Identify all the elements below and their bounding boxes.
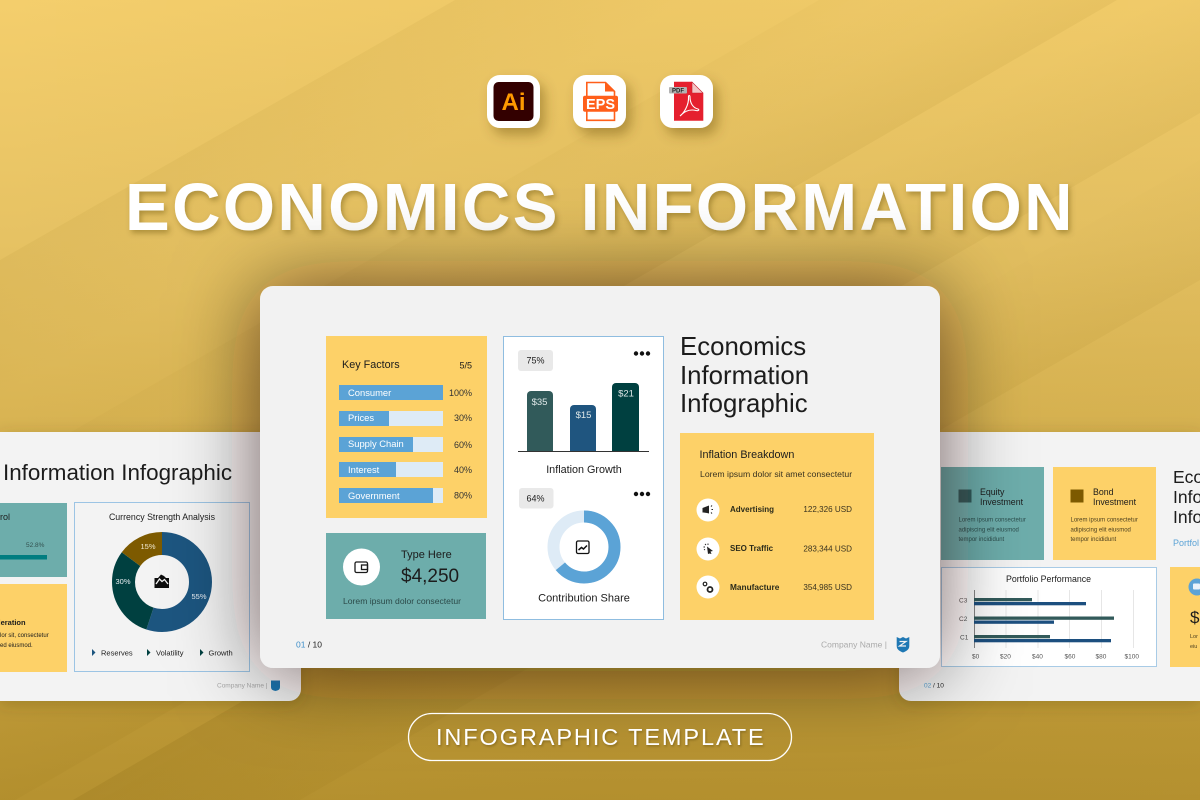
panel: type here value: Lorem ipsum dolor consectetur [343,596,461,606]
page number: 01 / 10 [296,640,322,650]
panel: key factors: 5/5 [459,360,472,370]
slide background [260,286,940,668]
panel: teal control: rol [0,512,10,522]
panel: yellow value: eiu [1190,644,1197,650]
row: advertising: Advertising [730,505,774,514]
slide title: Economics [680,333,806,361]
row: advertising: 122,326 USD [803,505,852,514]
bar chart: inflation growth [518,383,649,452]
legend: Reserves [101,648,133,658]
bar: prices: Prices [348,412,374,423]
donut chart: 55% [191,592,207,601]
panel: type here value [326,533,486,619]
right slide subtitle: Portfol [1173,538,1199,548]
bar chart: $100 [1124,654,1139,660]
chart heading: Inflation Growth [546,464,622,476]
slide title [680,333,809,418]
panel: yellow moderation: ed eiusmod. [0,643,33,649]
icon: gears [703,582,712,592]
panel: bond investment: tempor incididunt [1070,537,1117,543]
panel: bond investment: adipiscing elit eiusmod [1070,528,1131,534]
bar: interest: Interest [348,464,380,475]
left slide title: Information Infographic [3,460,232,485]
icon: trend chart [576,541,589,554]
panel: currency strength analysis [74,502,250,672]
slide title: Information [680,362,809,390]
panel: equity investment: Lorem ipsum consectetur [958,518,1026,524]
panel: equity investment: tempor incididunt [958,537,1005,543]
icon: Adobe Illustrator: Ai [502,89,526,116]
row: SEO traffic [696,538,852,560]
bar chart: inflation growth: $35 [532,397,547,408]
bar: interest [339,462,472,477]
chart heading: Currency Strength Analysis [109,512,216,522]
panel: bond investment: Investment [1093,497,1137,507]
row: SEO traffic: SEO Traffic [730,544,774,553]
bar: consumer: Consumer [348,387,391,398]
bar: consumer [339,385,472,400]
panel: yellow value [1170,567,1200,667]
bar chart: inflation growth: $15 [576,410,591,421]
donut chart: 15% [140,542,156,551]
bar: government [339,488,472,503]
panel: yellow moderation [0,584,67,672]
bar chart: $40 [1032,654,1043,660]
row: manufacture: Manufacture [730,582,780,592]
icon: PDF file: PDF [672,88,684,94]
icon: cursor click [704,544,713,554]
donut chart: contribution share [554,516,614,578]
logo [897,637,909,652]
bar: supply chain [339,437,472,452]
panel: equity investment [941,467,1044,560]
bar chart: $0 [972,654,980,660]
donut chart: 30% [115,577,131,586]
badge: 64% [519,488,554,508]
icon: Adobe Illustrator [487,75,540,128]
legend [92,648,233,658]
row: advertising [696,498,852,522]
left slide footer [217,680,280,691]
right slide footer: 02 / 10 [924,682,944,690]
panel: equity investment: Investment [980,497,1024,507]
row: SEO traffic: 283,344 USD [803,544,852,554]
icon: EPS file: EPS [586,96,615,113]
donut chart [115,542,207,620]
bar chart: C3 [959,598,968,604]
chart heading: Contribution Share [538,592,630,604]
center slide [260,286,940,668]
panel: key factors: Key Factors [342,359,400,371]
right slide title [1173,467,1200,527]
icon: PDF file [660,75,713,128]
badge: 75%: 75% [526,356,545,366]
bar: prices [339,411,472,426]
left slide footer: Company Name | [217,682,268,690]
bar: consumer: 100% [449,388,472,398]
bar chart: $20 [1000,654,1011,660]
panel: charts card [504,336,664,620]
icon: EPS file [573,75,626,128]
panel: bond investment: Bond [1093,487,1114,497]
bar chart: $80 [1096,654,1107,660]
bar: supply chain: Supply Chain [348,438,404,449]
template pill: INFOGRAPHIC TEMPLATE [436,724,766,750]
badge: 75% [518,350,553,371]
bar: prices: 30% [454,413,472,423]
panel: equity investment: Equity [980,487,1005,497]
bar chart: C2 [959,616,968,623]
panel: portfolio performance [942,568,1156,666]
template pill [408,714,792,760]
panel: yellow moderation: lor sit, consectetur [0,633,49,639]
panel: key factors [326,336,487,518]
icon: mountain chart [154,574,169,588]
panel: teal control [0,503,67,577]
badge: 64%: 64% [526,494,545,504]
right slide [899,432,1200,701]
panel: equity investment: adipiscing elit eiusmod [958,528,1019,534]
chart heading: Portfolio Performance [1006,574,1091,584]
panel: type here value: Type Here [401,549,452,561]
panel: bond investment: Lorem ipsum consectetur [1070,518,1138,524]
icon: more dots [634,351,650,356]
legend: Growth [208,648,233,658]
bar: supply chain: 60% [454,440,472,450]
icon: wallet [355,562,368,572]
legend: Volatility [156,648,184,658]
panel: teal control: 52.8% [26,542,45,549]
panel: yellow value: Lor [1190,634,1198,640]
panel: bond investment [1053,467,1156,560]
bar chart: inflation growth: $21 [618,388,634,400]
main title: ECONOMICS INFORMATION [125,170,1075,245]
icon: more dots [634,492,650,496]
panel: inflation breakdown: Lorem ipsum dolor sit amet consectetur [700,469,852,479]
row: manufacture [696,576,852,598]
bar chart [959,590,1139,660]
panel: type here value: $4,250 [401,566,459,587]
row: manufacture: 354,985 USD [803,583,852,592]
company name: Company Name | [821,640,887,650]
bar: government: 80% [454,490,472,500]
format icons [487,75,713,128]
bar: interest: 40% [454,465,472,475]
icon: megaphone [702,506,713,514]
slide title: Infographic [680,390,808,418]
left slide [0,432,301,701]
bar chart: C1 [960,634,969,642]
panel: inflation breakdown: Inflation Breakdown [700,449,794,461]
panel: inflation breakdown [680,433,874,620]
bar chart: $60 [1064,654,1076,660]
bar: government: Government [348,490,400,501]
